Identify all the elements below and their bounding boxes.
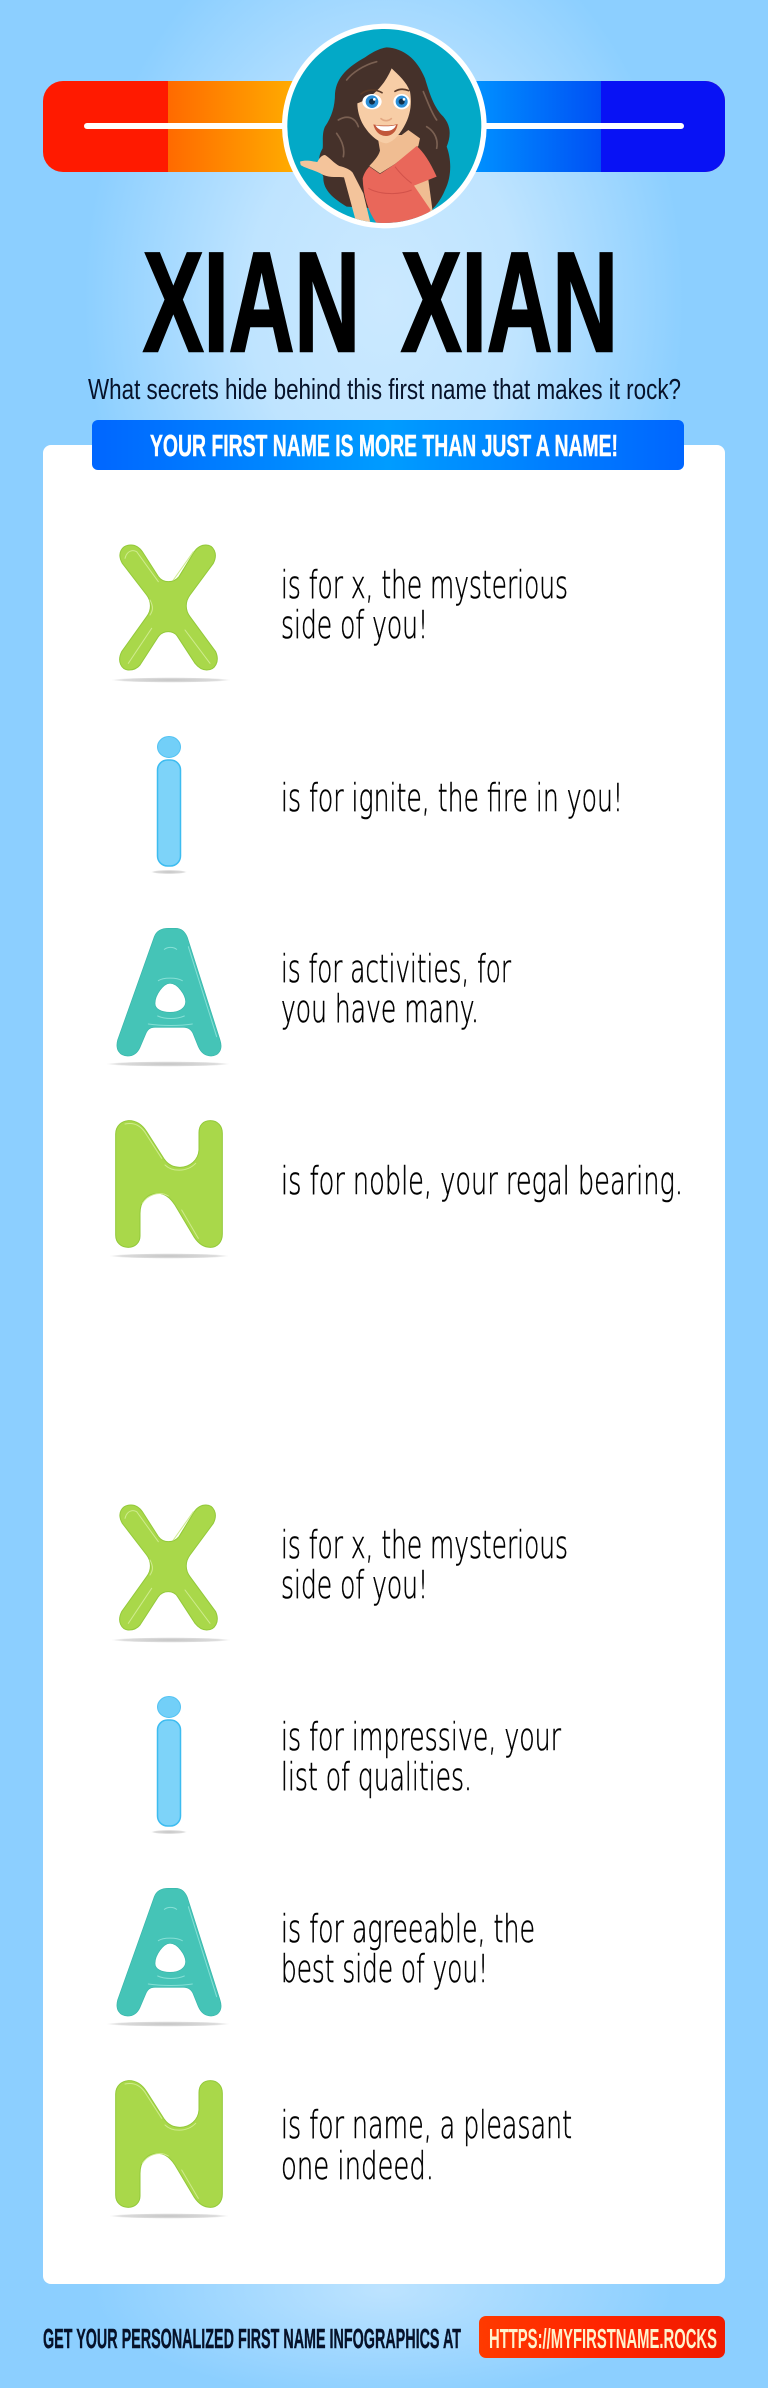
text: is for agreeable, the	[281, 1907, 535, 1951]
icon: letter N	[109, 1121, 229, 1258]
text	[281, 563, 568, 647]
row: X is for x	[111, 545, 568, 682]
nose	[381, 119, 391, 121]
icon: letter A	[106, 1888, 230, 2026]
icon: letter X	[111, 1505, 231, 1642]
hair	[319, 47, 450, 212]
row: A is for agreeable	[106, 1888, 535, 2026]
text: one indeed.	[281, 2144, 434, 2188]
text: is for x, the mysterious	[281, 563, 568, 607]
text: side of you!	[281, 603, 428, 647]
icon: portrait of a woman in a circle	[282, 24, 487, 228]
mouth	[373, 124, 398, 136]
row: I is for impressive	[151, 1696, 561, 1834]
eyes	[362, 94, 382, 109]
icon: letter X	[111, 545, 231, 682]
text	[281, 1907, 535, 1991]
banner	[92, 420, 684, 470]
header colour bar	[43, 81, 725, 172]
brows	[361, 89, 409, 94]
text: is for activities, for	[281, 947, 511, 991]
right arm	[414, 180, 432, 218]
neck and chest	[369, 130, 420, 173]
title: XIAN	[401, 223, 618, 382]
text: you have many.	[281, 987, 479, 1031]
left arm and hand	[300, 155, 371, 224]
text: best side of you!	[281, 1947, 488, 1991]
icon: letter A	[106, 928, 230, 1066]
text: is for impressive, your	[281, 1715, 561, 1759]
icon: letter i	[151, 736, 187, 874]
footer link button	[479, 2316, 725, 2358]
text	[281, 1715, 561, 1799]
icon: letter i	[151, 1696, 187, 1834]
row: N is for name	[109, 2081, 572, 2218]
text: list of qualities.	[281, 1755, 472, 1799]
text	[281, 947, 511, 1031]
text: is for name, a pleasant	[281, 2103, 572, 2147]
title: XIAN	[143, 223, 360, 382]
panel: white content card	[43, 445, 725, 2284]
icon: letter N	[109, 2081, 229, 2218]
text: is for x, the mysterious	[281, 1523, 568, 1567]
row: I is for ignite	[151, 736, 623, 874]
text	[281, 1523, 568, 1607]
shirt	[363, 146, 437, 223]
row: A is for activities	[106, 928, 511, 1066]
face	[357, 68, 411, 143]
row: X is for x (second name)	[111, 1505, 568, 1642]
text: side of you!	[281, 1563, 428, 1607]
row: N is for noble	[109, 1121, 683, 1258]
text	[281, 2103, 572, 2188]
